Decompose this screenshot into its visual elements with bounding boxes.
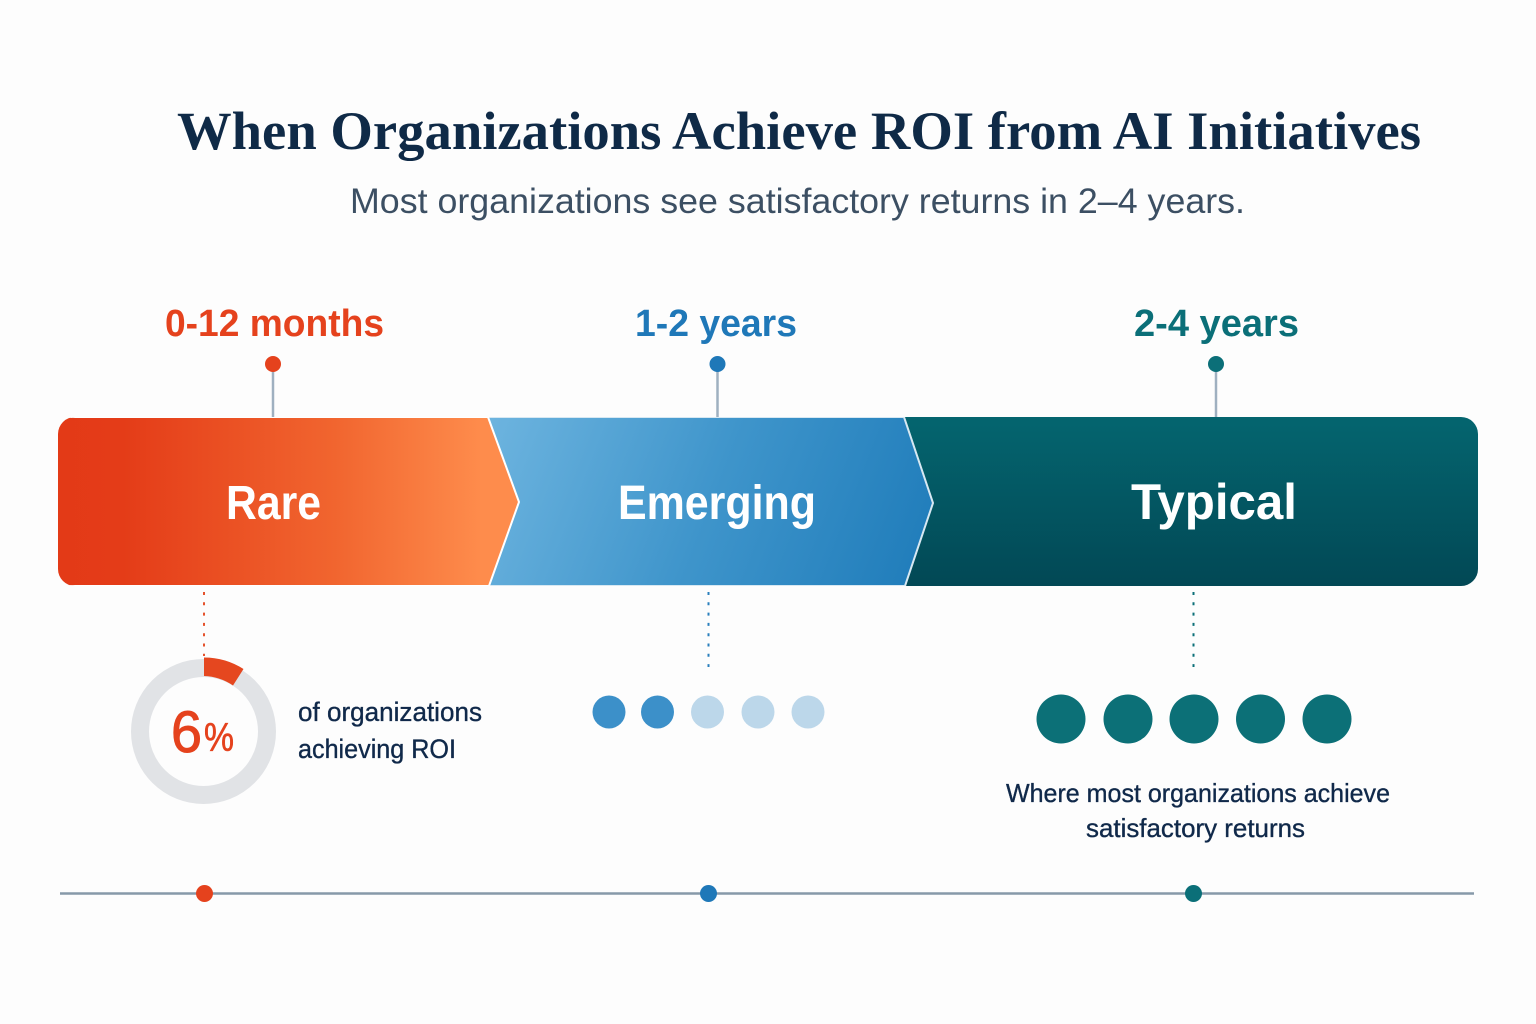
title: When Organizations Achieve ROI from AI Initiatives xyxy=(177,101,1421,161)
donut value: 6 xyxy=(171,700,202,765)
timeline bar xyxy=(50,417,1478,586)
caption: where most organizations achieve satisfactory returns: satisfactory returns xyxy=(1086,813,1305,843)
segment: Emerging xyxy=(475,417,933,586)
axis marker: Typical xyxy=(1185,885,1202,902)
dot row: Typical (5 of 5) xyxy=(1036,694,1352,744)
dotted connector: Emerging xyxy=(708,592,710,667)
donut chart: 6% xyxy=(140,658,267,795)
phase label: 0-12 months: 0-12 months xyxy=(165,303,384,345)
caption: where most organizations achieve satisfactory returns: Where most organizations achieve xyxy=(1006,778,1390,808)
caption: of organizations achieving ROI xyxy=(298,697,482,764)
segment label: Emerging: Emerging xyxy=(618,477,816,530)
dot row: Emerging (2 of 5) xyxy=(592,696,824,728)
segment label: Typical: Typical xyxy=(1131,474,1297,530)
subtitle: Most organizations see satisfactory returns in 2–4 years. xyxy=(350,182,1245,221)
axis marker: Emerging xyxy=(700,885,717,902)
dotted connector: Typical xyxy=(1192,592,1194,667)
segment: Typical xyxy=(890,417,1478,586)
marker pin: 2-4 years xyxy=(1208,356,1224,417)
caption: where most organizations achieve satisfactory returns xyxy=(1006,778,1390,843)
segment label: Rare: Rare xyxy=(226,477,321,530)
phase label: 1-2 years xyxy=(635,303,797,417)
dotted connector: Rare xyxy=(203,592,205,656)
phase label: 0-12 months xyxy=(165,303,384,417)
phase label: 2-4 years: 2-4 years xyxy=(1134,303,1299,345)
phase label: 1-2 years: 1-2 years xyxy=(635,303,797,345)
caption: of organizations achieving ROI: achieving ROI xyxy=(298,734,456,764)
axis marker: Rare xyxy=(196,885,213,902)
bottom axis xyxy=(60,885,1474,902)
caption: of organizations achieving ROI: of organizations xyxy=(298,697,482,727)
marker pin: 0-12 months xyxy=(265,356,281,417)
donut chart: 6%: % xyxy=(204,716,234,760)
marker pin: 1-2 years xyxy=(710,356,726,417)
segment: Rare xyxy=(50,417,519,586)
phase label: 2-4 years xyxy=(1134,303,1299,417)
